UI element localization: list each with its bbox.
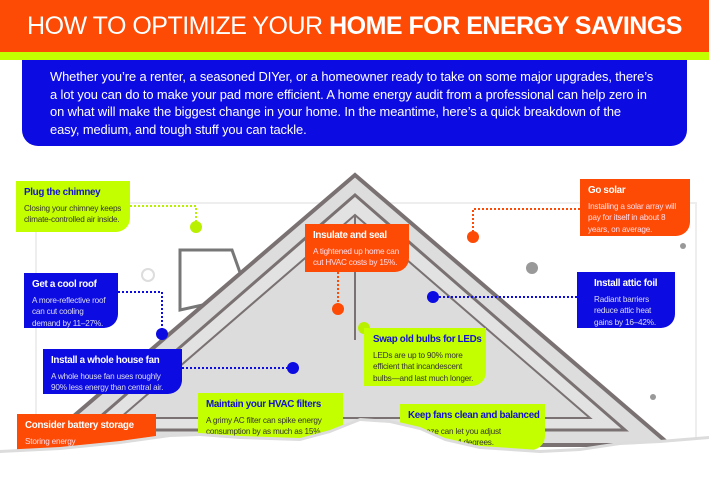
callout: HVAC filters: A grimy AC filter can spike energy consumption by as much as 15%.	[206, 416, 322, 436]
callout: plug the chimney: Plug the chimney	[24, 187, 100, 198]
torn paper edge	[0, 418, 709, 467]
intro text block: on what will make the biggest change in your home. In the meantime, here’s a quick breakdown of the	[50, 104, 621, 119]
header title	[0, 0, 709, 52]
callout: cool roof: A more-reflective roof can cut cooling demand by 11–27%.	[32, 296, 105, 328]
callout: whole house fan: Install a whole house fan	[51, 355, 159, 366]
callout: HVAC filters	[198, 393, 343, 445]
callout: attic foil: Install attic foil	[594, 278, 657, 289]
header title: HOW TO OPTIMIZE YOUR HOME FOR ENERGY SAVINGS	[27, 12, 682, 40]
callout: insulate and seal: Insulate and seal	[313, 230, 387, 241]
callout: fans: Keep fans clean and balanced	[408, 410, 540, 421]
callout: whole house fan: A whole house fan uses roughly 90% less energy than central air.	[51, 372, 163, 392]
callout: plug the chimney	[16, 181, 130, 232]
callout: battery storage: Storing energy	[25, 436, 75, 446]
callout: battery storage	[17, 414, 156, 454]
callout: cool roof: Get a cool roof	[32, 279, 97, 290]
callout: LEDs	[364, 328, 486, 386]
intro text block	[22, 60, 687, 146]
callout: attic foil	[577, 272, 675, 328]
callout: plug the chimney: Closing your chimney keeps climate-controlled air inside.	[24, 204, 121, 224]
callout: cool roof	[24, 273, 118, 328]
callout: attic foil: Radiant barriers reduce attic heat gains by 16–42%.	[594, 294, 656, 326]
callout: LEDs: Swap old bulbs for LEDs	[373, 334, 482, 345]
callout: fans: A breeze can let you adjust thermostat by 4 degrees.	[408, 426, 501, 447]
intro text block: Whether you’re a renter, a seasoned DIYer, or a homeowner ready to take on some major upgrades, there’s	[50, 69, 653, 84]
callout: go solar: Go solar	[588, 185, 625, 196]
callout: insulate and seal	[305, 224, 409, 272]
intro text block: a lot you can do to make your pad more efficient. A home energy audit from a professional can help zero in	[50, 86, 647, 102]
callout: insulate and seal: A tightened up home can cut HVAC costs by 15%.	[313, 246, 399, 267]
house illustration	[35, 172, 697, 447]
callout: HVAC filters: Maintain your HVAC filters	[206, 399, 321, 410]
intro text block: easy, medium, and tough stuff you can tackle.	[50, 122, 307, 136]
callout: battery storage: Consider battery storage	[25, 420, 134, 431]
callout: go solar: Installing a solar array will pay for itself in about 8 years, on average.	[588, 202, 676, 234]
callout: fans	[400, 404, 545, 450]
callout: whole house fan	[43, 349, 182, 394]
callout: LEDs: LEDs are up to 90% more efficient that incandescent bulbs—and last much longer.	[373, 350, 473, 382]
chimney	[180, 250, 248, 310]
callout: go solar	[580, 179, 690, 236]
